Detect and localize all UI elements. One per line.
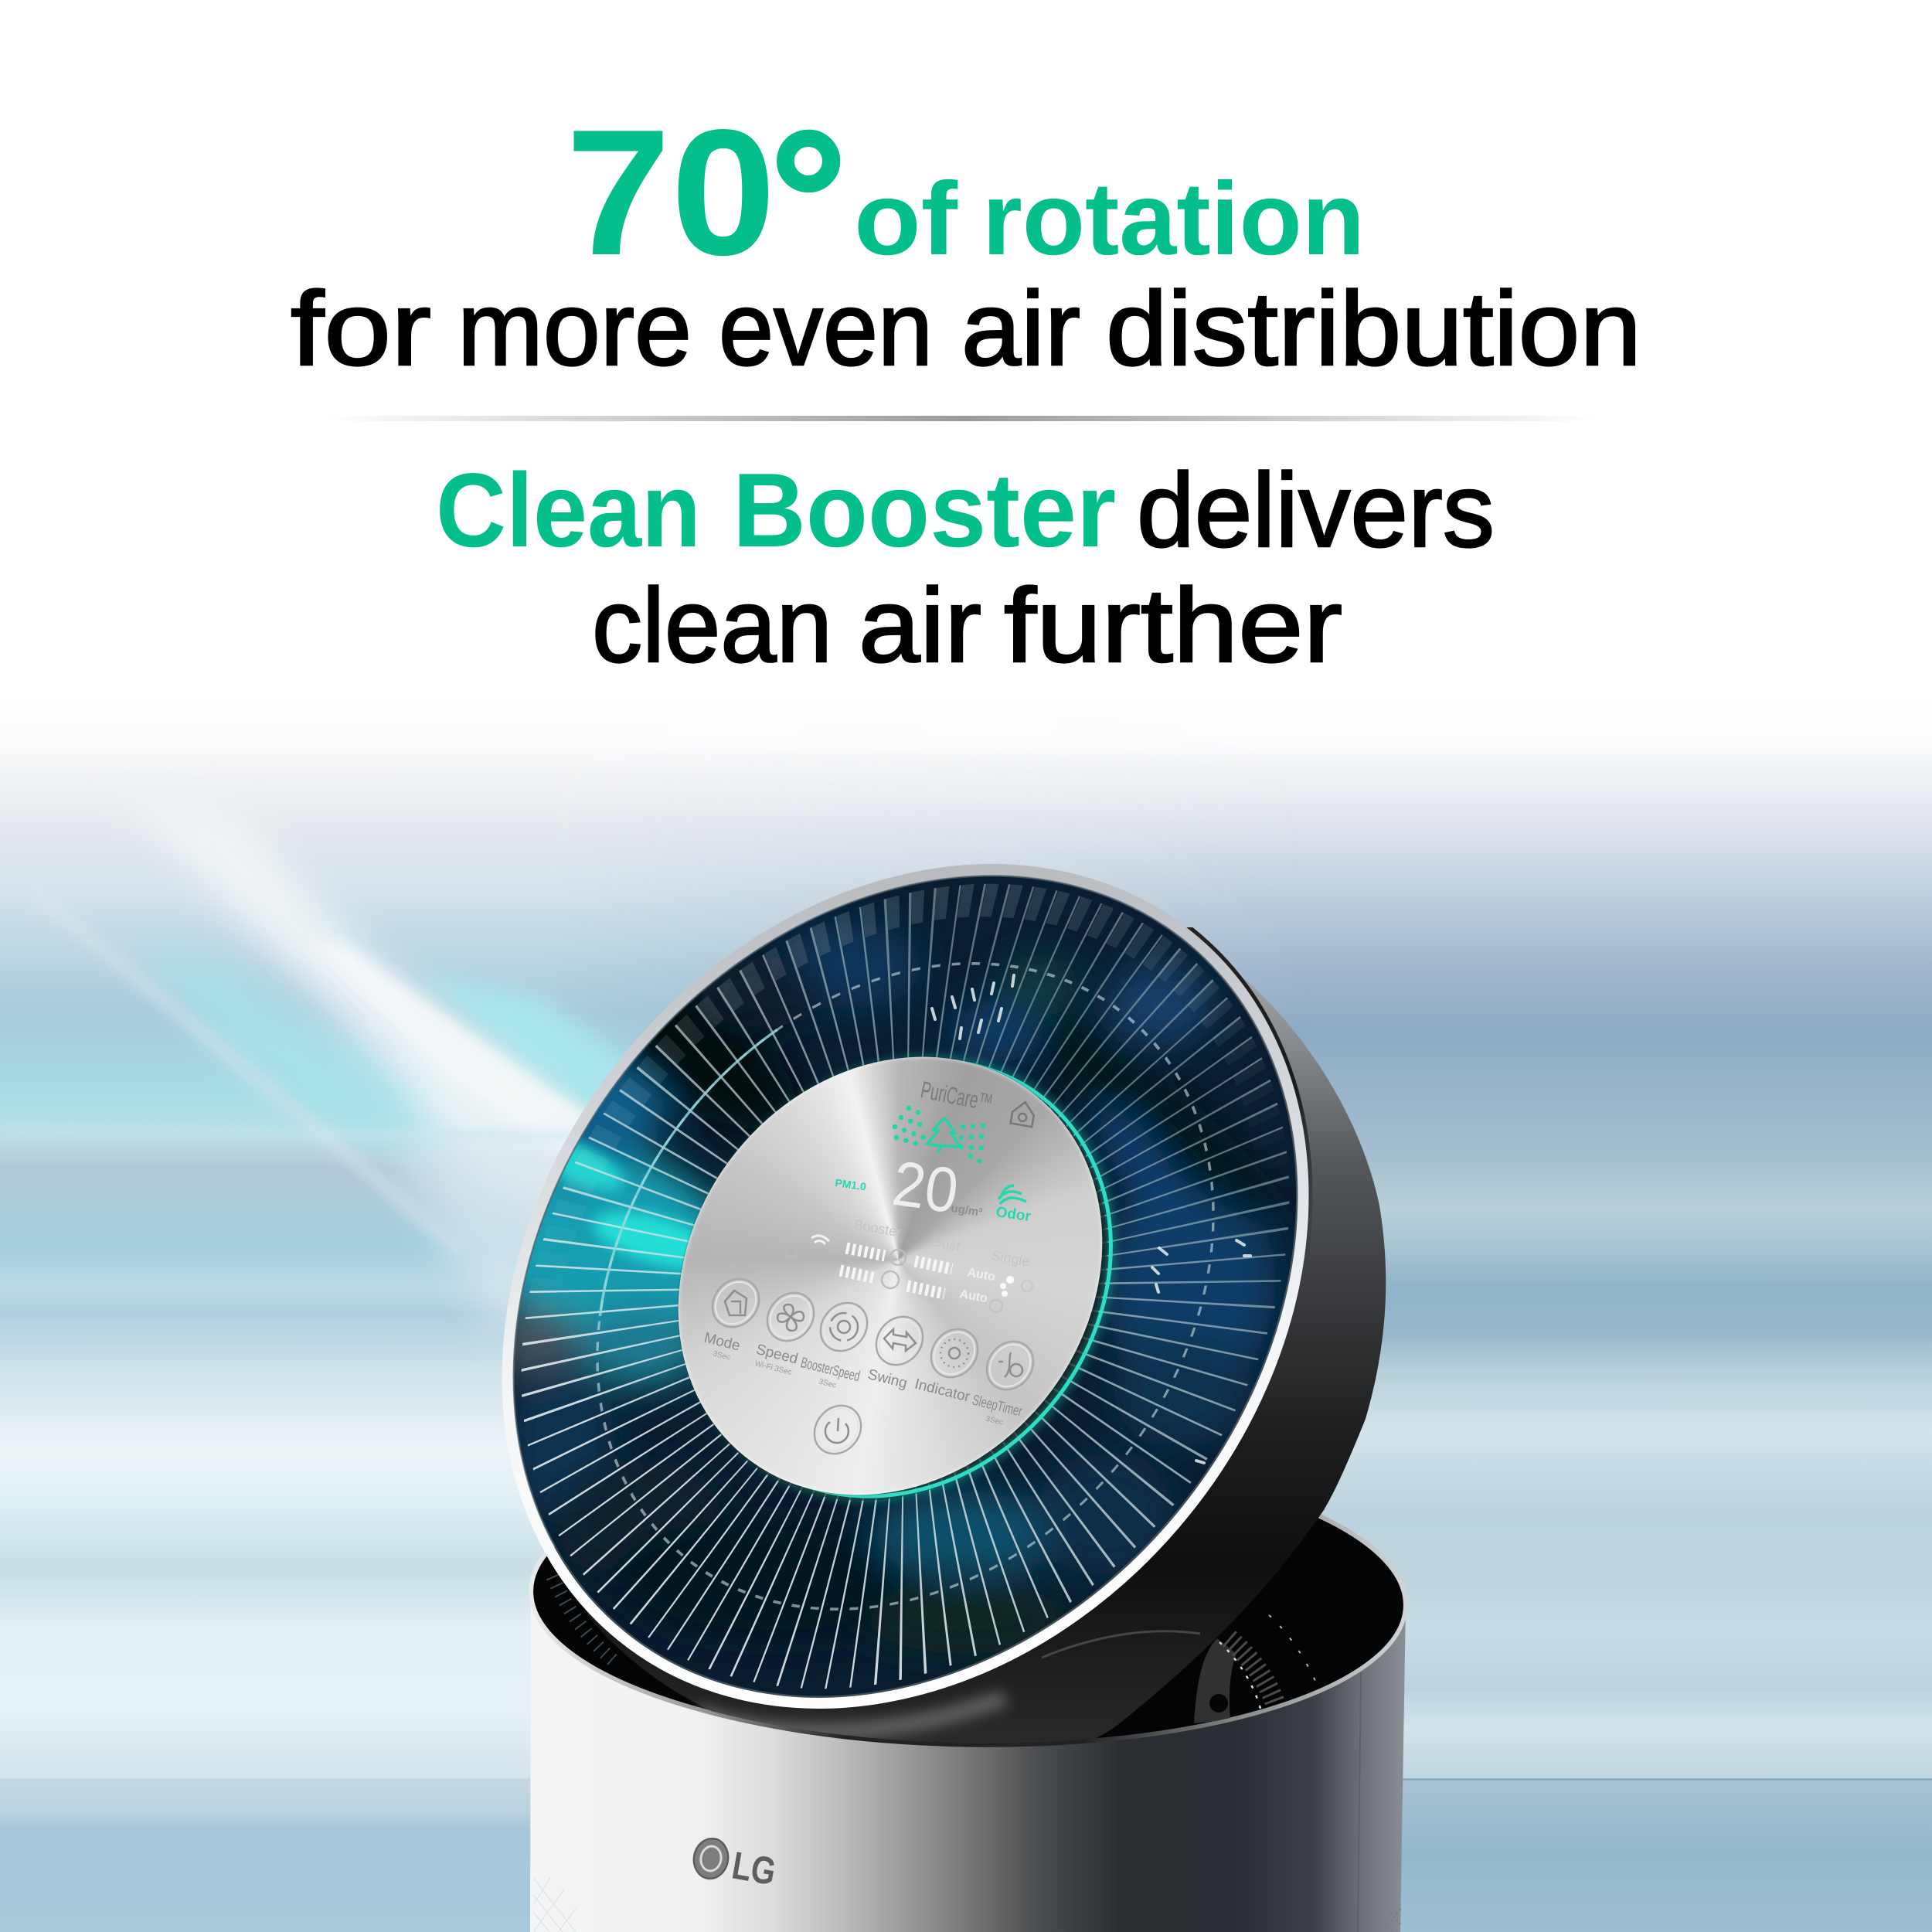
- purifier base interior: [529, 1444, 1408, 1753]
- sparkles: [932, 975, 1250, 1463]
- face colour glows: [427, 923, 1297, 1654]
- heading: Clean Booster: [436, 451, 1116, 569]
- LG logo: [690, 1836, 779, 1893]
- button labels: BoosterSpeed: [799, 1355, 862, 1385]
- heading: clean air further: air: [859, 566, 981, 684]
- interior fan grille: [553, 1577, 1320, 1723]
- rotating head body shell: [587, 873, 1386, 1764]
- icon: air quality dots: [895, 1108, 991, 1162]
- faded mode labels: Smart: [794, 1202, 833, 1224]
- button: booster: [811, 1294, 877, 1360]
- control panel details: [702, 1077, 1043, 1463]
- button labels: SleepTimer: [971, 1392, 1024, 1420]
- button labels: Indicator: [913, 1376, 972, 1406]
- heading: delivers: delivers: [1137, 451, 1495, 569]
- icon: odor waves: [998, 1185, 1026, 1204]
- radial louvre lines: [529, 900, 1282, 1672]
- subheading: air distribution: for: [291, 270, 431, 387]
- headline: 70 degrees: [566, 91, 847, 308]
- button: sleep timer: [977, 1332, 1043, 1399]
- PuriCare brand label: PuriCare™: [919, 1077, 995, 1117]
- dashed inner ring: [596, 962, 1215, 1611]
- Auto labels: [958, 1266, 996, 1305]
- headline: of rotation: of: [854, 162, 957, 277]
- subheading: air distribution: [291, 270, 1641, 387]
- LG logo: LG: [729, 1843, 779, 1893]
- sky and sea background: [0, 696, 1932, 1932]
- teal light core: [558, 1134, 695, 1276]
- faded mode labels: Dust: [930, 1233, 961, 1253]
- subheading: air distribution: distribution: [1106, 270, 1641, 387]
- icon: tree: [927, 1117, 960, 1153]
- headline: 70 degrees: 70: [566, 93, 776, 293]
- faded mode labels: Booster: [852, 1216, 903, 1240]
- PM label: PM1.0: [835, 1176, 867, 1193]
- rim fins: [536, 884, 1278, 1264]
- filter face with coloured light: [513, 876, 1297, 1696]
- heading: clean air further: clean: [592, 566, 832, 684]
- icon: white dots: [1000, 1276, 1014, 1297]
- button: speed: [757, 1284, 824, 1350]
- heading: Clean Booster: Clean: [436, 451, 701, 569]
- head chrome rim: [502, 864, 1312, 1709]
- unit label: ug/m³: [950, 1202, 983, 1219]
- level bars: [840, 1248, 952, 1294]
- faded mode labels: Single: [990, 1247, 1031, 1270]
- icon: small fan marks: [785, 1247, 1032, 1312]
- button labels: Mode: [702, 1330, 742, 1355]
- heading: Clean Booster: Booster: [733, 451, 1116, 569]
- air quality reading: 20: [888, 1148, 962, 1227]
- button labels: Speed: [754, 1342, 800, 1367]
- faded mode labels: [794, 1202, 1031, 1270]
- Auto labels: Auto: [958, 1287, 988, 1305]
- icon: smart home: [1011, 1100, 1036, 1127]
- button: mode: [702, 1270, 769, 1336]
- purifier base cylinder wall: [530, 1590, 1406, 1932]
- subheading: air distribution: more: [457, 270, 692, 387]
- button: indicator: [921, 1320, 988, 1386]
- Odor label: Odor: [995, 1204, 1032, 1225]
- subheading: air distribution: air: [961, 270, 1080, 387]
- button sub labels: [712, 1349, 1004, 1427]
- button labels: [702, 1330, 1024, 1420]
- silver control disc: [590, 971, 1190, 1580]
- solid ring arc: [598, 1028, 778, 1317]
- button: swing: [866, 1308, 933, 1374]
- button sub labels: 3Sec: [818, 1377, 837, 1390]
- headline: of rotation: rotation: [982, 162, 1365, 277]
- subheading: air distribution: even: [719, 270, 933, 387]
- button sub labels: Wi-Fi 3Sec: [754, 1359, 793, 1377]
- heading: clean air further: further: [1004, 566, 1342, 684]
- button sub labels: 3Sec: [985, 1414, 1004, 1427]
- divider: [325, 416, 1600, 421]
- heading: clean air further: [592, 566, 1342, 684]
- glass haze near rim: [412, 781, 1399, 1791]
- air flow beams: [68, 816, 623, 1332]
- teal glow ring around control disc: [593, 975, 1198, 1587]
- button sub labels: 3Sec: [712, 1349, 731, 1362]
- button labels: Swing: [866, 1366, 909, 1392]
- button: power: [804, 1396, 871, 1463]
- Auto labels: Auto: [966, 1266, 996, 1284]
- headline: 70 degrees: °: [770, 91, 847, 308]
- icon: wifi: [811, 1236, 829, 1244]
